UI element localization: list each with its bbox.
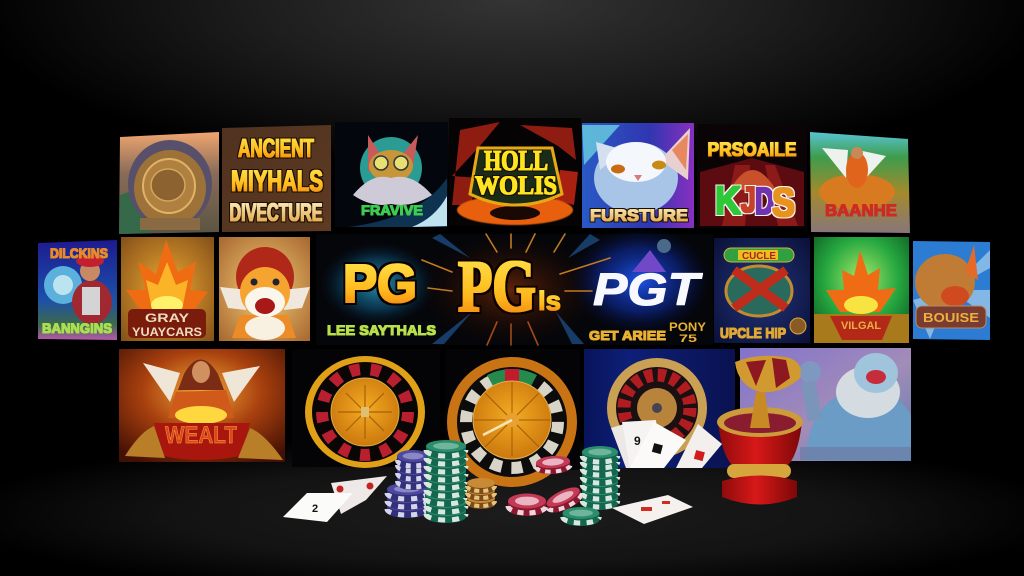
playing cards fan — [611, 420, 722, 468]
tile: gray yuaycars flame: YUAYCARS — [132, 325, 202, 339]
logo: pgs: PG — [458, 246, 536, 328]
tile: white cat furniture: FURSTURE — [590, 206, 688, 225]
tile: holl wolis: WOLIS — [475, 171, 557, 200]
tile: ancient medallion — [119, 132, 219, 234]
tile: blue roulette and cards — [584, 349, 735, 468]
tile: dilckins bannings: BANNGINS — [42, 320, 112, 336]
tile: happy winged cat — [219, 237, 310, 341]
tile: orange roulette wheel — [445, 349, 580, 487]
orange chip stack — [467, 478, 495, 509]
tile: owl-cat emblem: FRAVIVE — [361, 202, 423, 218]
tile: gray yuaycars flame — [121, 237, 214, 341]
tile: green flame bowl: VILGAL — [841, 320, 881, 332]
tile: gray yuaycars flame: GRAY — [145, 311, 189, 325]
left playing cards: 2 — [312, 503, 318, 515]
light rays — [422, 234, 610, 345]
tile: prsoaile kids: K — [715, 179, 741, 223]
logo: pg: PG — [343, 254, 417, 314]
trophy cup — [717, 356, 803, 504]
tile: ancient myhals divecture — [222, 125, 331, 232]
tile: white cat furniture — [582, 123, 694, 228]
logo: pgt: PGT — [593, 264, 703, 315]
tile: ancient myhals divecture: ANCIENT — [238, 133, 314, 163]
logo: pgs: ls — [538, 286, 561, 316]
foreground casino props — [283, 356, 803, 526]
tile: uncle hip cross — [714, 238, 810, 343]
tile: holl wolis: HOLL — [484, 146, 548, 177]
tile: prsoaile kids: J — [741, 179, 756, 220]
tile: prsoaile kids: S — [772, 181, 795, 225]
tile: wealt angel — [119, 349, 285, 462]
tile: prsoaile kids: PRSOAILE — [708, 140, 796, 161]
row 1: game tiles — [119, 118, 910, 234]
caption: pony 75: 75 — [679, 333, 697, 345]
tile: blue yeti — [740, 348, 911, 461]
right green chip stack — [563, 446, 618, 526]
caption: pony 75: PONY — [669, 320, 706, 334]
caption: pony 75 — [669, 320, 706, 345]
row 3: game tiles — [119, 348, 911, 487]
banner: pg logos — [316, 226, 713, 346]
red chips — [508, 455, 585, 516]
left playing cards — [283, 476, 387, 522]
purple chip stack — [387, 450, 429, 518]
caption: lee saythals: LEE SAYTHALS — [327, 322, 436, 338]
tile: wealt angel: WEALT — [165, 422, 237, 449]
tile: baanhe landscape — [810, 132, 910, 233]
green chip stack — [425, 440, 466, 523]
tile: bouise fox — [913, 241, 990, 340]
tile: holl wolis — [449, 118, 581, 226]
tile: baanhe landscape: BAANHE — [825, 201, 897, 220]
tile: ancient myhals divecture: MIYHALS — [231, 165, 323, 198]
logo: pgt — [593, 239, 703, 315]
tile: uncle hip cross: CUCLE — [742, 251, 776, 262]
tile: gold roulette wheel — [292, 349, 440, 468]
playing cards fan: 9 — [634, 434, 641, 448]
tile: ancient myhals divecture: DIVECTURE — [230, 199, 322, 227]
tile: green flame bowl — [814, 237, 909, 343]
tile: bouise fox: BOUISE — [923, 310, 979, 325]
row 2: game tiles and banner — [38, 226, 990, 346]
tile: uncle hip cross: UPCLE HIP — [720, 325, 786, 342]
tile: prsoaile kids — [697, 124, 807, 228]
caption: get ariee: GET ARIEE — [589, 328, 666, 343]
right playing card — [612, 495, 693, 524]
tile: dilckins bannings — [38, 240, 117, 340]
tile: prsoaile kids: D — [755, 181, 774, 223]
tile: dilckins bannings: DILCKINS — [50, 245, 108, 261]
tile: owl-cat emblem — [335, 122, 448, 227]
